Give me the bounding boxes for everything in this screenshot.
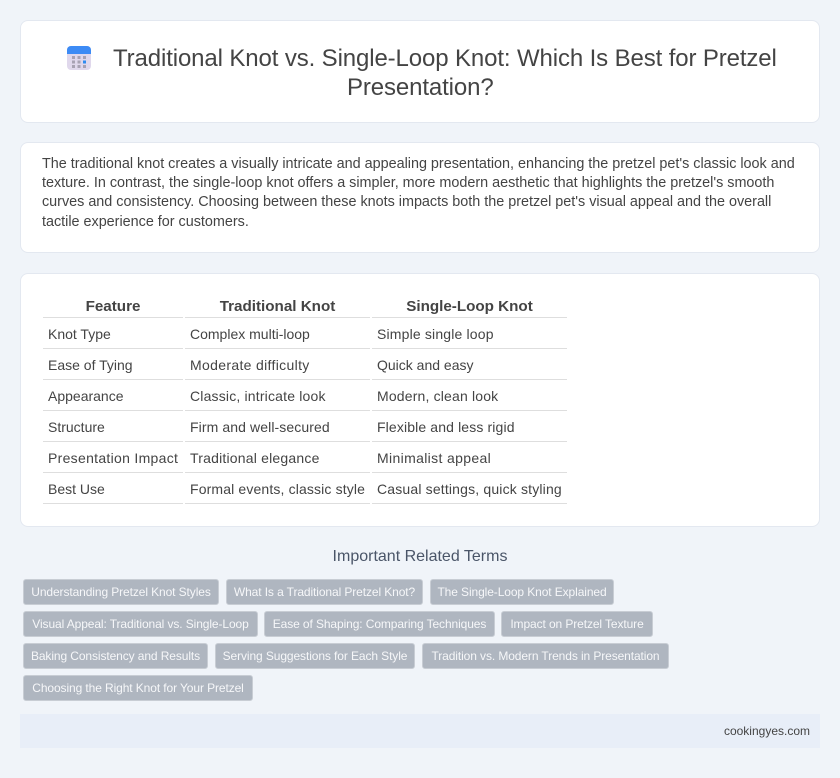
- tag: Impact on Pretzel Texture: [510, 617, 644, 631]
- intro text: [42, 156, 795, 230]
- row: Ease of Tying: Ease of Tying: [48, 357, 133, 373]
- row: Presentation Impact: Traditional elegance: [190, 450, 320, 466]
- row: Structure: Flexible and less rigid: [377, 419, 515, 435]
- row: Best Use: Best Use: [48, 481, 105, 497]
- row: Best Use: Formal events, classic style: [190, 481, 365, 497]
- tag: [422, 643, 669, 669]
- tag: What Is a Traditional Pretzel Knot?: [234, 585, 415, 599]
- title: [113, 45, 777, 101]
- panel: intro card: [20, 142, 820, 253]
- row: Appearance: [48, 388, 498, 404]
- tag: Visual Appeal: Traditional vs. Single-Loop: [32, 617, 249, 631]
- tag: Understanding Pretzel Knot Styles: [31, 585, 211, 599]
- row: Structure: Firm and well-secured: [190, 419, 330, 435]
- tag: Serving Suggestions for Each Style: [223, 649, 407, 663]
- tag: [23, 611, 258, 637]
- row: Appearance: Classic, intricate look: [190, 388, 326, 404]
- row: Presentation Impact: [48, 450, 491, 466]
- tag: [264, 611, 495, 637]
- row: Ease of Tying: [48, 357, 474, 373]
- row: Appearance: Appearance: [48, 388, 124, 404]
- tag: [226, 579, 423, 605]
- row: Best Use: [48, 481, 562, 497]
- row: Ease of Tying: Moderate difficulty: [190, 357, 310, 373]
- row: Knot Type: Complex multi-loop: [190, 326, 310, 342]
- heading: related terms: Important Related Terms: [333, 548, 507, 565]
- intro text: curves and consistency. Choosing between these knots impacts both the pretzel pet's visual appeal and the overall: [42, 194, 771, 210]
- table header: Traditional Knot: Traditional Knot: [220, 298, 335, 315]
- table header: Feature: Feature: [86, 298, 140, 315]
- row: Structure: Structure: [48, 419, 105, 435]
- intro text: The traditional knot creates a visually intricate and appealing presentation, enhancing the pretzel pet's classic look and: [42, 156, 795, 172]
- icon: calendar: [67, 46, 91, 70]
- row: Appearance: Modern, clean look: [377, 388, 498, 404]
- intro text: tactile experience for customers.: [42, 214, 249, 230]
- row: Best Use: Casual settings, quick styling: [377, 481, 562, 497]
- tag: [215, 643, 415, 669]
- footer bar: [20, 714, 820, 748]
- row: Ease of Tying: Quick and easy: [377, 357, 474, 373]
- row: Knot Type: [48, 326, 494, 342]
- panel: comparison table card: [20, 273, 820, 527]
- row: Presentation Impact: Minimalist appeal: [377, 450, 491, 466]
- tag: [23, 579, 219, 605]
- tag: [430, 579, 614, 605]
- table header: Single-Loop Knot: Single-Loop Knot: [406, 298, 533, 315]
- row: Knot Type: Knot Type: [48, 326, 111, 342]
- title: Presentation?: [347, 74, 494, 101]
- tag: Tradition vs. Modern Trends in Presentation: [431, 649, 660, 663]
- row: Knot Type: Simple single loop: [377, 326, 494, 342]
- title: Traditional Knot vs. Single-Loop Knot: Which Is Best for Pretzel: [113, 45, 777, 72]
- row: Structure: [48, 419, 515, 435]
- related terms tags: [23, 579, 669, 701]
- panel: title card: [20, 20, 820, 123]
- intro text: texture. In contrast, the single-loop knot offers a simpler, more modern aesthetic that highlights the pretzel's smooth: [42, 175, 774, 191]
- footer source text: cookingyes.com: [724, 724, 810, 738]
- tag: [23, 643, 208, 669]
- tag: Ease of Shaping: Comparing Techniques: [273, 617, 486, 631]
- row: Presentation Impact: Presentation Impact: [48, 450, 178, 466]
- tag: [23, 675, 253, 701]
- tag: Baking Consistency and Results: [31, 649, 200, 663]
- tag: Choosing the Right Knot for Your Pretzel: [32, 681, 244, 695]
- comparison table: [43, 317, 567, 504]
- tag: [501, 611, 653, 637]
- tag: The Single-Loop Knot Explained: [437, 585, 607, 599]
